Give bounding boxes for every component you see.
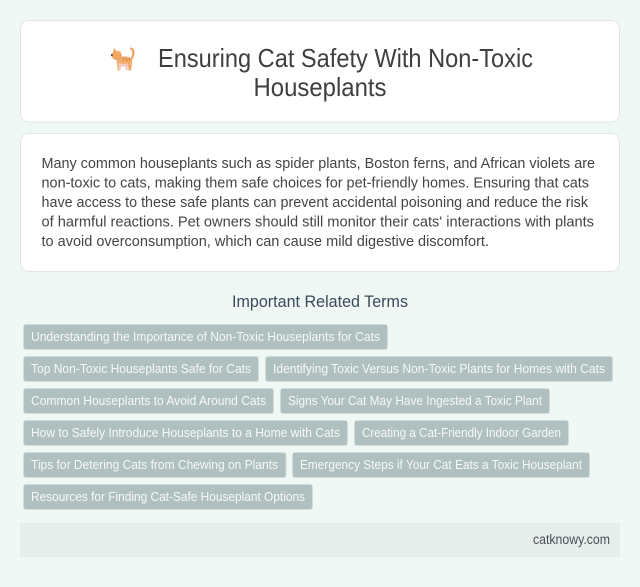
- panel: title card: [20, 20, 620, 122]
- tag: cat-friendly garden: [354, 420, 568, 446]
- footer source text: catknowy.com: [533, 532, 610, 547]
- heading: important related terms: Important Related Terms: [232, 293, 408, 311]
- tag: cat-friendly garden: Creating a Cat-Friendly Indoor Garden: [362, 425, 561, 440]
- panel: related term tags: [24, 324, 612, 510]
- description text: have access to these safe plants can prevent accidental poisoning and reduce the risk: [42, 194, 588, 211]
- tag: identifying toxic versus non-toxic: Identifying Toxic Versus Non-Toxic Plants for Homes with Cats: [273, 361, 605, 376]
- tag: signs of ingestion: [280, 388, 550, 414]
- description text: to avoid overconsumption, which can cause mild digestive discomfort.: [42, 233, 489, 250]
- tag: resources: [24, 484, 312, 510]
- tag: common houseplants to avoid: [24, 388, 274, 414]
- description text: Many common houseplants such as spider plants, Boston ferns, and African violets are: [42, 155, 595, 172]
- title text: Ensuring Cat Safety With Non-Toxic: [158, 43, 533, 73]
- tag: emergency steps: [292, 452, 590, 478]
- tag: emergency steps: Emergency Steps if Your Cat Eats a Toxic Houseplant: [300, 457, 582, 472]
- description text: [42, 155, 595, 250]
- tag: identifying toxic versus non-toxic: [266, 356, 612, 382]
- tag: top non-toxic houseplants: Top Non-Toxic Houseplants Safe for Cats: [31, 361, 251, 376]
- tag: safely introduce houseplants: How to Safely Introduce Houseplants to a Home with Cats: [31, 425, 340, 440]
- title text: Houseplants: [254, 72, 386, 102]
- tag: understanding importance: Understanding the Importance of Non-Toxic Houseplants for Cats: [31, 329, 380, 344]
- tag: understanding importance: [24, 324, 388, 350]
- description text: of harmful reactions. Pet owners should still monitor their cats' interactions with plants: [42, 214, 594, 230]
- tag: safely introduce houseplants: [24, 420, 348, 446]
- tag: tips for detering: Tips for Detering Cats from Chewing on Plants: [31, 457, 278, 472]
- tag: tips for detering: [24, 452, 286, 478]
- tag: resources: Resources for Finding Cat-Safe Houseplant Options: [31, 489, 305, 504]
- tag: top non-toxic houseplants: [24, 356, 258, 382]
- tag: signs of ingestion: Signs Your Cat May Have Ingested a Toxic Plant: [288, 393, 542, 408]
- tag: common houseplants to avoid: Common Houseplants to Avoid Around Cats: [31, 393, 266, 408]
- icon: cat: [111, 48, 134, 70]
- title text: [158, 43, 533, 102]
- panel: description card: [20, 134, 620, 272]
- description text: non-toxic to cats, making them safe choices for pet-friendly homes. Ensuring that cats: [42, 174, 589, 192]
- footer bar: [20, 523, 620, 557]
